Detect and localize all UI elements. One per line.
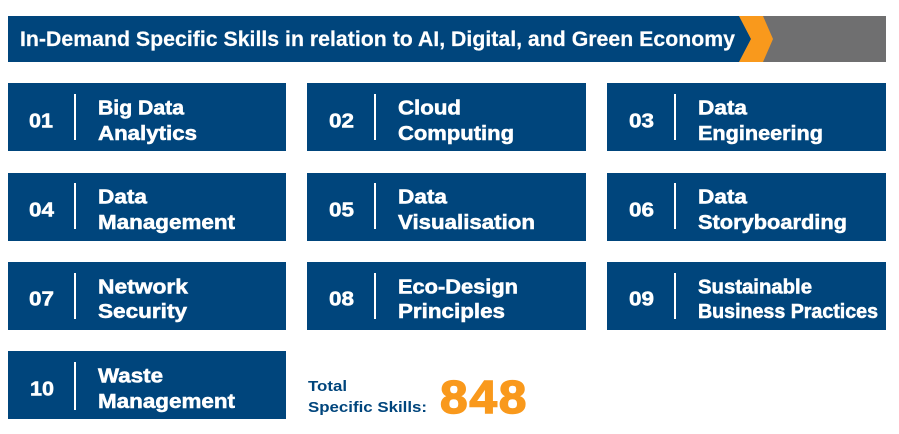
skill card 02: 02 (329, 110, 354, 132)
skill card 03 (607, 83, 886, 151)
skill card 03: 03 (629, 110, 654, 132)
skill card 03: Data (698, 96, 748, 120)
total specific skills label (308, 378, 427, 416)
skill card 04: 04 (29, 200, 55, 222)
total specific skills label: Specific Skills: (308, 399, 427, 416)
skill card 06 (607, 173, 886, 241)
skill card 08 (307, 262, 586, 330)
total specific skills label: Total (308, 378, 347, 395)
skill card 09: Sustainable (698, 276, 812, 298)
skill card 07: Security (98, 300, 188, 323)
skill card 10: 10 (30, 378, 54, 400)
skill card 06: 06 (629, 200, 654, 222)
skill card 07 (8, 262, 286, 330)
skill card 10: Management (98, 390, 235, 413)
skill card 01: Analytics (98, 122, 197, 145)
title text: In-Demand Specific Skills in relation to AI, Digital, and Green Economy (20, 28, 735, 51)
skill card 03: Engineering (698, 122, 823, 145)
skill card 08: 08 (329, 288, 354, 310)
skill card 08: Eco-Design (398, 276, 518, 298)
skill card 07: Network (98, 276, 189, 298)
skill card 09: Business Practices (698, 300, 878, 323)
skill card 09: 09 (629, 288, 654, 310)
title banner (8, 16, 886, 62)
skill card 07: 07 (29, 288, 54, 310)
skill card 02: Computing (398, 122, 514, 145)
skill card 05 (307, 173, 586, 241)
skill card 10: Waste (98, 364, 163, 388)
skill card 05: 05 (329, 200, 354, 222)
skill card 01: 01 (29, 110, 53, 132)
total value 848: 848 (440, 373, 528, 424)
skill card 04 (8, 173, 286, 241)
skill card 04: Data (98, 186, 148, 208)
skill card 01: Big Data (98, 96, 185, 120)
skill card 06: Storyboarding (698, 211, 847, 234)
skill card 04: Management (98, 211, 235, 234)
skill card 02 (307, 83, 586, 151)
icon: orange chevron (739, 16, 773, 62)
skill card 09 (607, 262, 886, 330)
skill card 06: Data (698, 186, 748, 208)
skill card 08: Principles (398, 300, 505, 323)
skill card 10 (8, 351, 286, 419)
skill card 02: Cloud (398, 96, 461, 120)
skill card 05: Visualisation (398, 211, 535, 234)
skill card 01 (8, 83, 286, 151)
skill card 05: Data (398, 186, 448, 208)
